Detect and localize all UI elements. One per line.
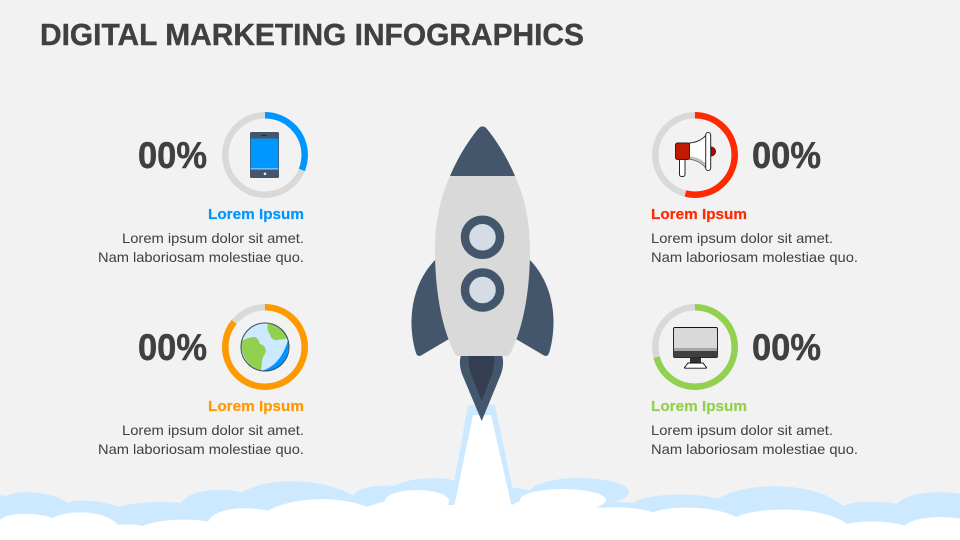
label: Lorem Ipsum [208, 398, 304, 415]
ring gauge green [655, 307, 735, 387]
rocket [411, 126, 554, 421]
left fin [411, 259, 449, 356]
back cloud layer [0, 478, 960, 540]
ring gauge orange [225, 307, 305, 387]
title: DIGITAL MARKETING INFOGRAPHICS [40, 17, 584, 52]
panel: green, bottom right [651, 307, 858, 457]
upper window [465, 220, 500, 255]
icon: globe [241, 323, 289, 371]
description: Lorem ipsum dolor sit amet. [122, 230, 304, 246]
percent: 00% [138, 135, 207, 176]
percent: 00% [752, 135, 821, 176]
flame inner [469, 355, 494, 401]
ring gauge blue [225, 115, 305, 195]
icon: monitor [674, 328, 718, 368]
description [98, 230, 304, 265]
ring gauge red [655, 115, 735, 195]
icon: megaphone [676, 132, 716, 176]
description: Nam laboriosam molestiae quo. [651, 249, 858, 265]
description: Lorem ipsum dolor sit amet. [651, 422, 833, 438]
exhaust white core [453, 415, 513, 512]
description: Lorem ipsum dolor sit amet. [122, 422, 304, 438]
front cloud layer [0, 489, 960, 540]
rocket nose [450, 126, 515, 176]
description: Nam laboriosam molestiae quo. [98, 249, 304, 265]
panel: red, top right [651, 115, 858, 265]
description: Nam laboriosam molestiae quo. [651, 441, 858, 457]
percent: 00% [138, 327, 207, 368]
clouds and exhaust [0, 405, 960, 540]
exhaust outer glow [449, 405, 517, 510]
flame outer [460, 355, 503, 421]
panel: blue, top left [98, 115, 305, 265]
lower window [465, 272, 500, 308]
description [98, 422, 304, 457]
description [651, 230, 858, 265]
label: Lorem Ipsum [208, 206, 304, 223]
label: Lorem Ipsum [651, 398, 747, 415]
description: Lorem ipsum dolor sit amet. [651, 230, 833, 246]
rocket body [435, 176, 530, 356]
icon: tablet [250, 132, 279, 178]
label: Lorem Ipsum [651, 206, 747, 223]
description [651, 422, 858, 457]
description: Nam laboriosam molestiae quo. [98, 441, 304, 457]
panel: orange, bottom left [98, 307, 305, 457]
percent: 00% [752, 327, 821, 368]
right fin [516, 259, 554, 356]
